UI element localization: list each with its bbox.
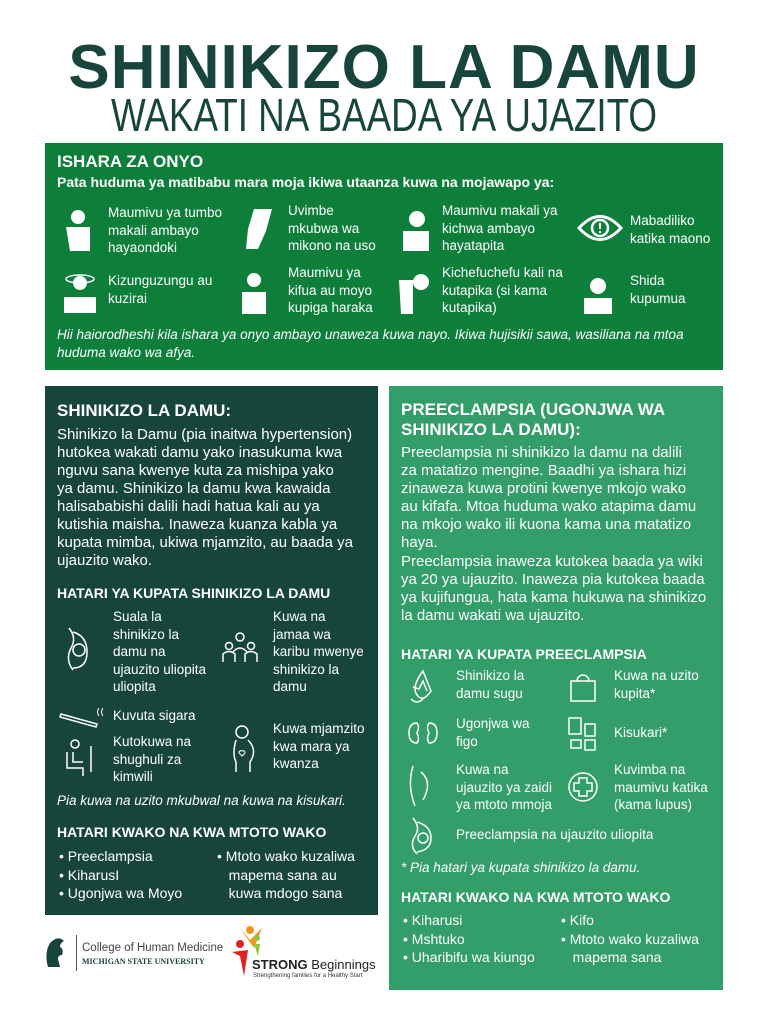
bullets left: • Mshtuko [403,930,465,946]
text: uliopita [113,679,156,694]
text: karibu mwenye [273,644,364,659]
text: shughuli za [113,752,181,766]
logo: Strong Beginnings [232,924,382,980]
text: nausea: kutapika) [442,300,497,315]
text: maumivu katika [614,780,708,794]
body text [401,444,696,551]
icon: dizziness [64,274,96,313]
text: Shinikizo la [456,668,524,683]
body text: nguvu sana kwenye kuta za mishipa yako [57,462,334,479]
text: Kuvimba na [614,762,685,777]
icon: stomach pain [66,210,90,251]
text: dizziness: kuzirai [108,290,147,306]
icon: previous preeclampsia [407,816,437,856]
text: Kisukari* [614,725,667,740]
heading: SHINIKIZO LA DAMU: [57,401,231,420]
icon: kidney [408,722,438,744]
text [614,668,699,701]
bullets left [403,911,535,966]
note: italic: huduma wako wa afya. [57,344,195,360]
panel: high blood pressure [45,386,378,915]
panel: warning signs [45,143,723,370]
text: chest pain [288,265,373,315]
text: damu [273,679,307,694]
icon: multiple pregnancy [410,766,428,806]
text: nausea: Kichefuchefu kali na [442,265,563,280]
icon: breathing [584,278,612,314]
body text 2: ya kujifungua, hata kama hukuwa na shinikizo [401,589,706,606]
text: headache: kichwa ambayo [442,220,535,236]
text: vision: Mabadiliko [630,213,695,228]
body text 2: la damu wakati wa ujauzito. [401,607,584,624]
icon: diabetes [568,717,596,751]
heading: risks to you and baby: HATARI KWAKO NA KWA MTOTO WAKO [401,889,670,905]
body text: zinaweza kuwa protini kwenye mkojo wako [401,480,686,497]
text: Kuwa na uzito [614,668,699,683]
text: swelling: Uvimbe [288,203,334,218]
icon: eye [577,215,623,241]
text: Kuwa na [456,762,509,777]
icon: nausea [399,274,429,314]
icon: headache [403,211,429,251]
heading: risks: HATARI YA KUPATA SHINIKIZO LA DAMU [57,585,330,601]
body text: kutishia maisha. Inaweza kuanza kabla ya [57,516,337,533]
note: italic [57,327,684,360]
text: headache: Maumivu makali ya [442,203,558,218]
subtitle: WAKATI NA BAADA YA UJAZITO [111,89,657,141]
body text: Preeclampsia ni shinikizo la damu na dalili [401,444,682,461]
text: kwanza [273,756,319,771]
text [614,761,708,814]
icon: chest pain [242,273,266,314]
bullets left: • Ugonjwa wa Moyo [59,885,182,901]
text: swelling: mkubwa wa [288,220,359,236]
text [456,716,530,749]
text [456,668,524,701]
text: kwa mara ya [273,738,350,754]
subheading: Pata huduma ya matibabu mara moja ikiwa utaanza kuwa na mojawapo ya: [57,174,554,190]
note italic: * Pia hatari ya kupata shinikizo la damu. [401,860,640,875]
text: swelling: mikono na uso [288,238,376,253]
text: ya mtoto mmoja [456,797,552,812]
text: Ugonjwa wa [456,716,530,731]
bullets left: • Preeclampsia [59,848,153,864]
text: nausea [442,265,563,315]
icon: swelling hand [246,209,272,249]
text: nausea: kutapika (si kama [442,282,547,298]
bullets right: • Kifo [561,912,594,928]
text: kimwili [113,769,153,784]
logo: MSU College of Human Medicine: College of Human Medicine [82,942,223,954]
icon: plus circle [567,771,599,803]
text: ujauzito uliopita [113,662,206,676]
text: breathing: Shida [630,273,665,288]
text: chest pain: kifua au moyo [288,282,372,298]
icon: chronic bp [410,670,432,703]
heading [401,400,665,439]
text: stomach pain [108,205,222,255]
heading: PREECLAMPSIA (UGONJWA WA [401,400,665,419]
body text 2: ya 20 ya ujauzito. Inaweza pia kutokea baada [401,571,705,588]
text [273,721,365,771]
bullets right: • Mtoto wako kuzaliwa [217,848,355,864]
bullets left [59,848,182,901]
note italic: Pia kuwa na uzito mkubwal na kuwa na kisukari. [57,793,346,808]
note: italic: Hii haiorodheshi kila ishara ya onyo ambayo unaweza kuwa nayo. Ikiwa hujisikii sawa, wasiliana na mtoa [57,327,684,342]
text: Suala la [113,609,162,624]
bullets right [217,848,355,901]
text: vision [630,213,710,246]
text: damu sugu [456,686,523,700]
body text: za matatizo mengine. Baadhi ya ishara hizi [401,462,686,479]
text: Preeclampsia na ujauzito uliopita [456,827,653,842]
text: stomach pain: makali ambayo [108,222,199,238]
text: Kuwa mjamzito [273,721,365,736]
logo: Strong Beginnings: Strengthening families for a Healthy Start [253,973,362,979]
body text: kupata mimba, ukiwa mjamzito, au baada ya [57,534,353,551]
text [456,761,552,814]
body text 2 [401,553,706,624]
text: breathing [630,273,686,306]
text: stomach pain: Maumivu ya tumbo [108,205,222,220]
icon: family [222,632,258,662]
icon: inactivity [66,739,92,776]
heading: risks preeclampsia: HATARI YA KUPATA PREECLAMPSIA [401,646,647,662]
logo: Strong Beginnings: STRONG Beginnings [252,957,376,972]
text: kupita* [614,686,655,700]
text: Kuwa na [273,609,326,624]
text: headache [442,203,558,253]
text: dizziness: Kizunguzungu au [108,273,212,288]
heading: risks to you and baby: HATARI KWAKO NA KWA MTOTO WAKO [57,824,326,840]
body text 2: Preeclampsia inaweza kutokea baada ya wiki [401,553,703,570]
text: damu na [113,644,166,659]
text: headache: hayatapita [442,238,504,253]
text: shinikizo la [113,626,179,642]
bullets left: • Kiharusi [403,912,462,928]
text: Kuvuta sigara [113,708,196,723]
body text: ya damu. Shinikizo la damu kwa kawaida [57,480,330,497]
text [113,609,206,694]
text: chest pain: kupiga haraka [288,300,373,315]
bullets right [561,911,699,966]
text: chest pain: Maumivu ya [288,265,361,280]
text: (kama lupus) [614,797,692,812]
icon: previous pregnancy [68,628,88,670]
text: figo [456,734,478,748]
logo: MSU College of Human Medicine [44,935,214,973]
text: shinikizo la [273,662,339,676]
text: stomach pain: hayaondoki [108,240,177,255]
icon: pregnant [233,725,254,772]
text: swelling [288,203,376,253]
logo: MSU College of Human Medicine: MICHIGAN STATE UNIVERSITY [82,957,205,966]
text: jamaa wa [273,626,331,642]
title: SHINIKIZO LA DAMU [68,33,700,102]
bullets right: • Mtoto wako kuzaliwa [561,930,699,946]
body text: halisababishi dalili hadi hatua kali au ya [57,498,320,515]
icon: cigarette [59,708,104,728]
bullets right: kuwa mdogo sana [229,885,342,901]
text: Kutokuwa na [113,734,191,749]
heading: warning signs: ISHARA ZA ONYO [57,152,203,171]
text: breathing: kupumua [630,290,686,306]
bullets left: • Uharibifu wa kiungo [403,949,535,965]
bullets right: mapema sana [573,949,661,965]
body text: au kifafa. Mtoa huduma wako atapima damu [401,498,696,515]
body text: na mkojo wako ili kuona kama una matatizo [401,516,691,533]
text: ujauzito ya zaidi [456,780,552,794]
body text [57,426,353,569]
panel: preeclampsia [389,386,723,990]
heading: SHINIKIZO LA DAMU): [401,420,581,439]
text [272,609,364,694]
body text: hutokea wakati damu yako inasukuma kwa [57,444,342,461]
body text: Shinikizo la Damu (pia inaitwa hypertension) [57,426,352,443]
icon: weight [570,674,596,702]
bullets right: mapema sana au [229,866,337,882]
bullets left: • KiharusI [59,866,119,882]
text [113,734,191,784]
text: dizziness [108,273,212,306]
text: vision: katika maono [630,230,710,246]
body text: ujauzito wako. [57,552,152,569]
body text: haya. [401,534,438,551]
